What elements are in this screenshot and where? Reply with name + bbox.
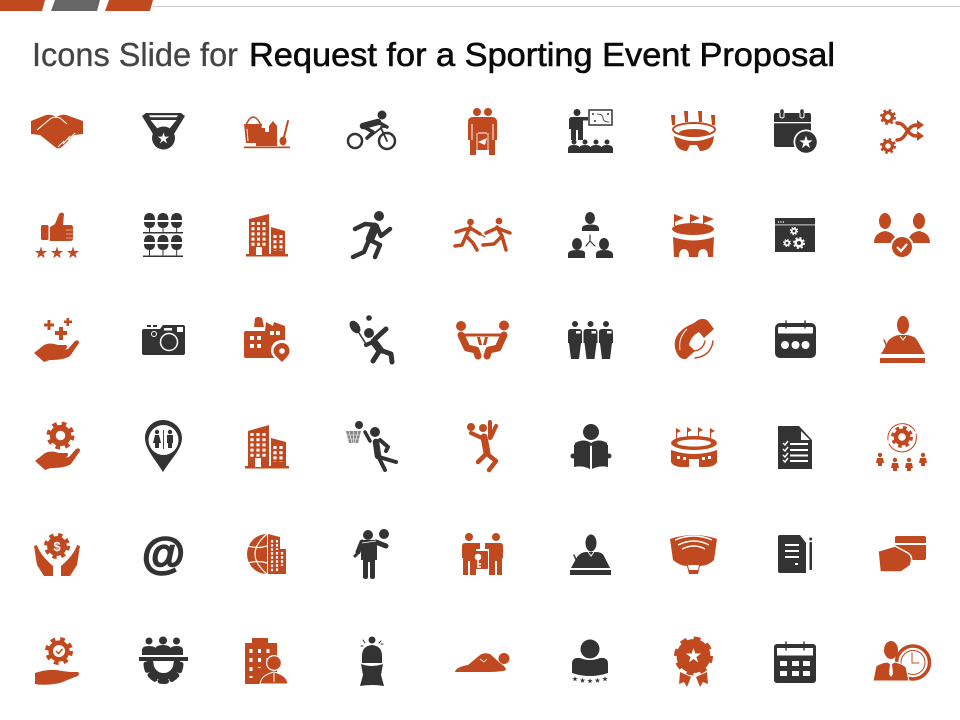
icon: team above gear [139, 636, 188, 682]
icon: coach at tactics board [568, 109, 613, 153]
icon: stadium seats [143, 213, 183, 257]
icon: award rosette [676, 638, 712, 687]
icon: three men with badges [568, 321, 613, 359]
icon: map pin with restroom figures [145, 420, 182, 472]
icon: hands holding dollar gear: $ [53, 539, 61, 554]
title: Icons Slide for [32, 36, 238, 73]
icon: man writing at desk (dark) [570, 534, 611, 575]
icon: stadium with flags [671, 111, 715, 151]
icon: relay runners [455, 218, 510, 250]
icon: telephone handset [675, 319, 714, 359]
icon: round stadium [670, 535, 717, 574]
icon: hand holding gear with check [35, 639, 79, 685]
icon: person reading a book [570, 424, 612, 469]
icon: person lying down [455, 653, 510, 672]
title: Request for a Sporting Event Proposal [249, 36, 835, 73]
icon: two men with jersey [468, 108, 497, 155]
icon: volleyball player [467, 422, 496, 470]
icon: man writing at desk [880, 316, 925, 363]
icon: hand holding card [878, 536, 926, 572]
icon: basketball player [346, 421, 396, 470]
icon: sack race [360, 636, 384, 686]
icon: hand holding gear [35, 424, 80, 470]
icon: globe and buildings [247, 534, 286, 574]
icon: camera [142, 325, 185, 355]
icon: stadium with four flags [671, 427, 717, 467]
icon: calendar with dots [775, 321, 816, 358]
icon: process gear with people [876, 424, 927, 471]
icon: man carrying person [355, 529, 389, 579]
icon: runner [353, 211, 390, 257]
icon: checklist document [778, 426, 812, 469]
icon: at sign: @ [142, 529, 185, 578]
header accent bars [0, 0, 960, 11]
icon: businessman with clock [873, 641, 930, 681]
icon: gears and shuffle arrows [881, 110, 924, 153]
icon: cyclist [348, 110, 395, 149]
icon: person with five stars [572, 640, 608, 683]
icon: office building with person [245, 638, 288, 684]
icon: hands holding dollar gear [34, 535, 80, 576]
icon: medal [142, 113, 185, 150]
icon: office buildings [246, 214, 288, 256]
icon: thumbs up with three stars [35, 212, 79, 258]
icon: browser window with gears [775, 218, 815, 252]
icon: hand with sparkles [34, 318, 79, 362]
icon: castle-style stadium [672, 214, 714, 257]
icon: city buildings [245, 425, 289, 468]
icon: team hierarchy [568, 212, 613, 258]
icon: two men with key board [462, 533, 503, 575]
icon: people with check mark [874, 213, 930, 259]
icon: calendar with star [774, 111, 818, 154]
icon: tug of war [456, 320, 509, 356]
icon: bucket and sand castle [244, 117, 290, 148]
icon: handshake [31, 115, 83, 148]
icon: tennis player [347, 315, 392, 362]
icon: document and pen [778, 535, 812, 573]
icon: calendar grid [774, 642, 816, 683]
icon: factory with location pin [244, 317, 292, 365]
